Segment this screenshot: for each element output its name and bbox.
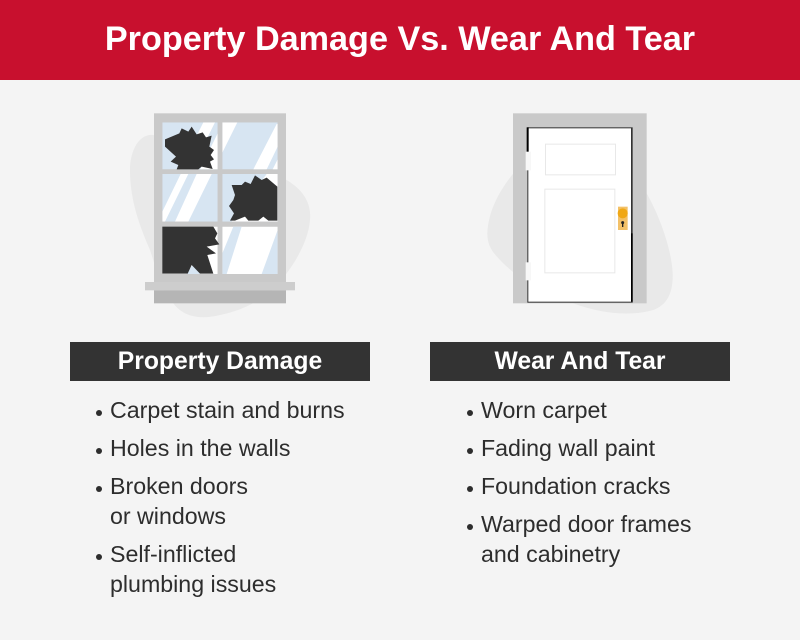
heading: property damage <box>70 342 370 381</box>
list: wear and tear <box>467 397 692 567</box>
list item: Foundation cracks <box>481 473 670 499</box>
upper door panel <box>546 144 616 175</box>
hinges <box>526 152 531 280</box>
title banner <box>0 0 800 80</box>
door frame <box>513 113 647 303</box>
list item <box>467 511 692 567</box>
illustration: door <box>488 113 672 314</box>
list item <box>96 473 248 529</box>
broken glass shards <box>162 127 277 274</box>
list: property damage <box>96 397 345 597</box>
list item: Worn carpet <box>481 397 607 423</box>
list item: Fading wall paint <box>481 435 655 461</box>
list item: Holes in the walls <box>110 435 290 461</box>
blob background <box>487 173 673 313</box>
title banner: Property Damage Vs. Wear And Tear <box>105 20 695 58</box>
door knob <box>618 207 628 230</box>
list item: or windows <box>110 503 226 529</box>
window frame <box>154 113 286 290</box>
heading: wear and tear <box>430 342 730 381</box>
list item <box>96 541 276 597</box>
list item: Carpet stain and burns <box>110 397 345 423</box>
list item: Warped door frames <box>481 511 692 537</box>
window sill <box>145 282 295 290</box>
door leaf <box>527 127 633 303</box>
heading: property damage: Property Damage <box>118 348 322 375</box>
illustration: broken window <box>130 113 310 317</box>
glass panes <box>162 122 278 274</box>
heading: wear and tear: Wear And Tear <box>494 348 666 375</box>
list item: Self-inflicted <box>110 541 236 567</box>
list item: Broken doors <box>110 473 248 499</box>
lower door panel <box>545 189 615 273</box>
blob background <box>130 135 310 317</box>
list item: plumbing issues <box>110 571 276 597</box>
list item: and cabinetry <box>481 541 620 567</box>
